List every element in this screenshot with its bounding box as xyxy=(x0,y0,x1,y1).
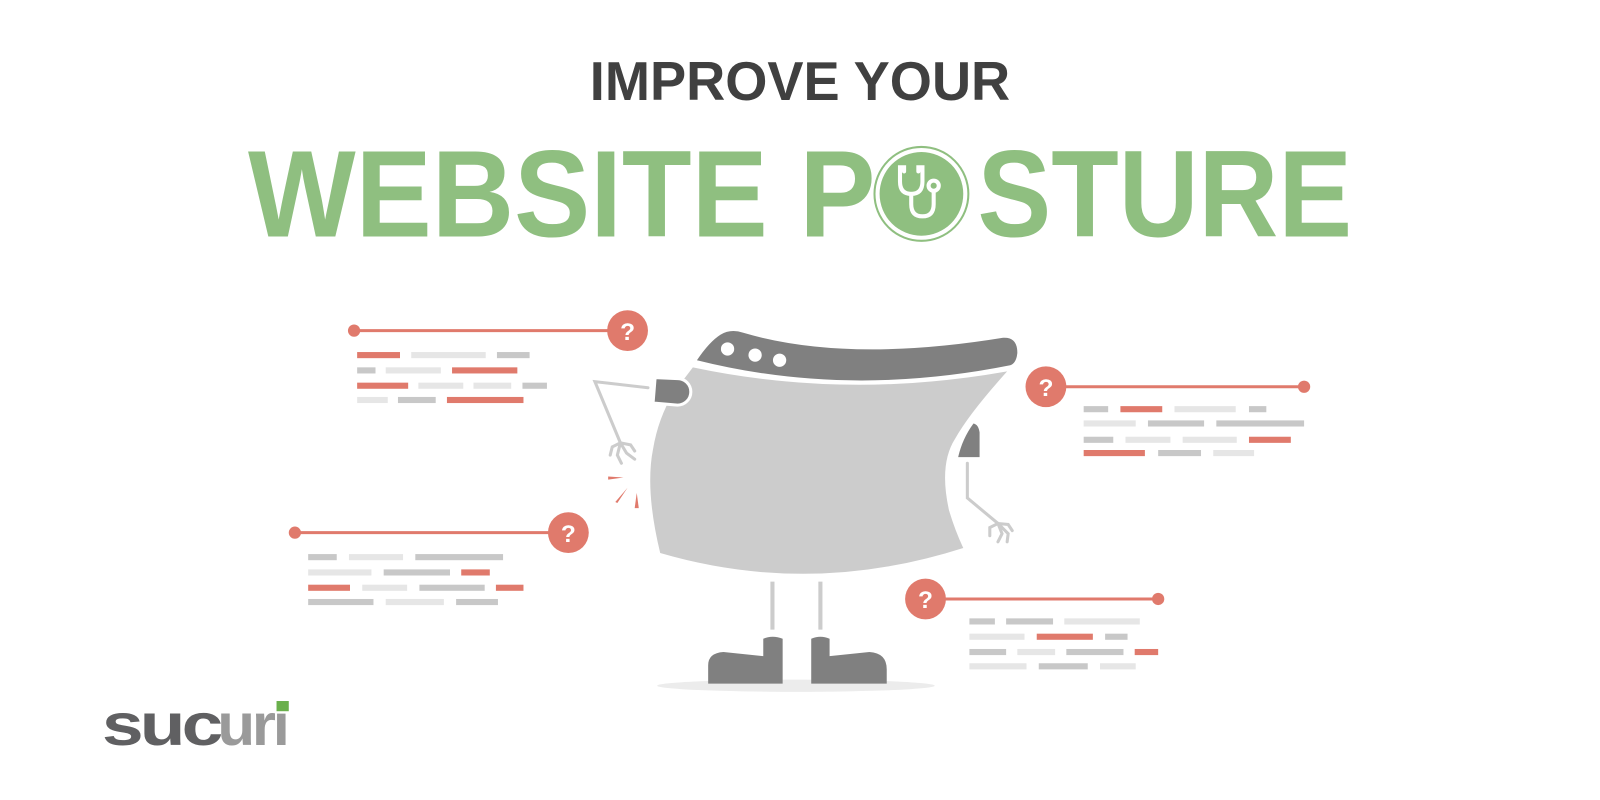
logo: sucuri xyxy=(102,691,289,758)
icon: question bottom-left xyxy=(548,512,589,553)
nose xyxy=(653,378,691,405)
icon: question right: ? xyxy=(1038,375,1053,402)
right ear xyxy=(958,423,980,457)
feet xyxy=(708,637,887,684)
logo: sucuri: suc xyxy=(102,691,222,758)
shadow xyxy=(657,680,935,692)
character: browser window xyxy=(595,331,1017,692)
title: website posture xyxy=(248,126,1352,264)
top bar xyxy=(697,331,1017,380)
text block: top-left xyxy=(348,310,648,403)
right arm xyxy=(967,463,1012,542)
legs xyxy=(772,582,820,630)
sparks xyxy=(608,477,639,508)
title: website posture: STURE xyxy=(978,126,1352,264)
title: website posture: WEBSITE P xyxy=(248,126,876,264)
icon: question bottom-right: ? xyxy=(918,587,933,614)
body xyxy=(650,367,1007,574)
icon: question bottom-right xyxy=(905,579,946,619)
title: improve your: IMPROVE YOUR xyxy=(590,50,1010,112)
icon: question top-left xyxy=(607,310,648,351)
text block: bottom-right xyxy=(905,579,1164,669)
icon: question bottom-left: ? xyxy=(561,521,576,548)
text block: bottom-left xyxy=(289,512,589,605)
logo: sucuri: uri xyxy=(217,691,287,758)
left arm xyxy=(595,382,648,463)
icon: stethoscope circle xyxy=(874,147,968,241)
icon: question top-left: ? xyxy=(620,319,635,346)
icon: question right xyxy=(1026,366,1066,407)
text block: right xyxy=(1026,366,1310,456)
